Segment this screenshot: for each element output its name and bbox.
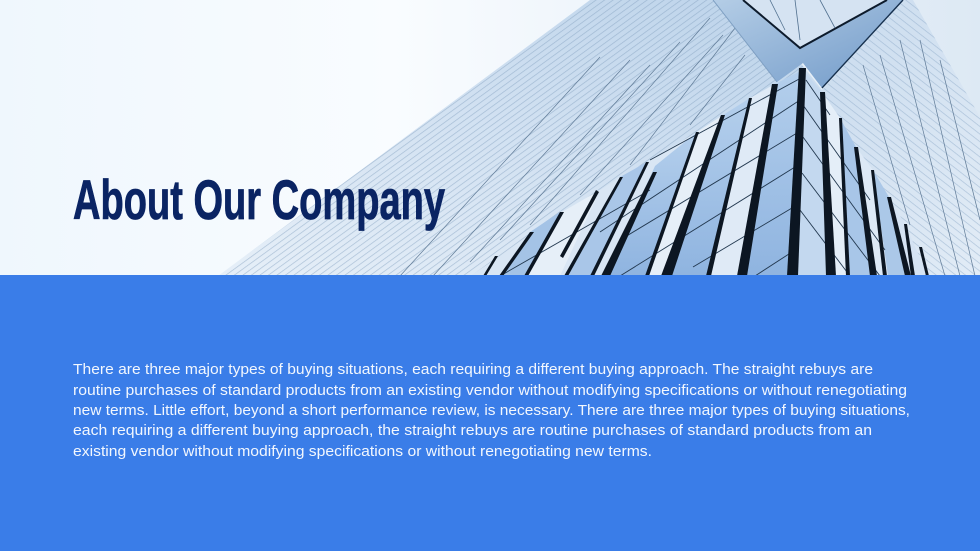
window panes right of corner — [792, 70, 928, 276]
body text: routine purchases of standard products from an existing vendor without modifying specifications or without renegotiating — [73, 382, 907, 399]
heading: About Our Company — [73, 168, 445, 231]
dark mullions — [483, 68, 929, 276]
body text — [73, 361, 910, 460]
panel: blue text area — [0, 275, 980, 551]
apex band — [713, 0, 903, 88]
photo: skyscraper header — [0, 0, 980, 276]
body text: new terms. Little effort, beyond a short performance review, is necessary. There are three major types of buying situations, — [73, 402, 910, 419]
body text: existing vendor without modifying specifications or without renegotiating new terms. — [73, 443, 652, 460]
building right face — [792, 0, 980, 276]
body text: each requiring a different buying approach, the straight rebuys are routine purchases of standard products from an — [73, 422, 872, 439]
long diagonal facade lines — [400, 15, 980, 276]
body text: There are three major types of buying situations, each requiring a different buying approach. The straight rebuys are — [73, 361, 873, 378]
window transoms — [500, 78, 885, 276]
building left face — [218, 0, 803, 276]
window panes left of corner — [470, 70, 802, 276]
